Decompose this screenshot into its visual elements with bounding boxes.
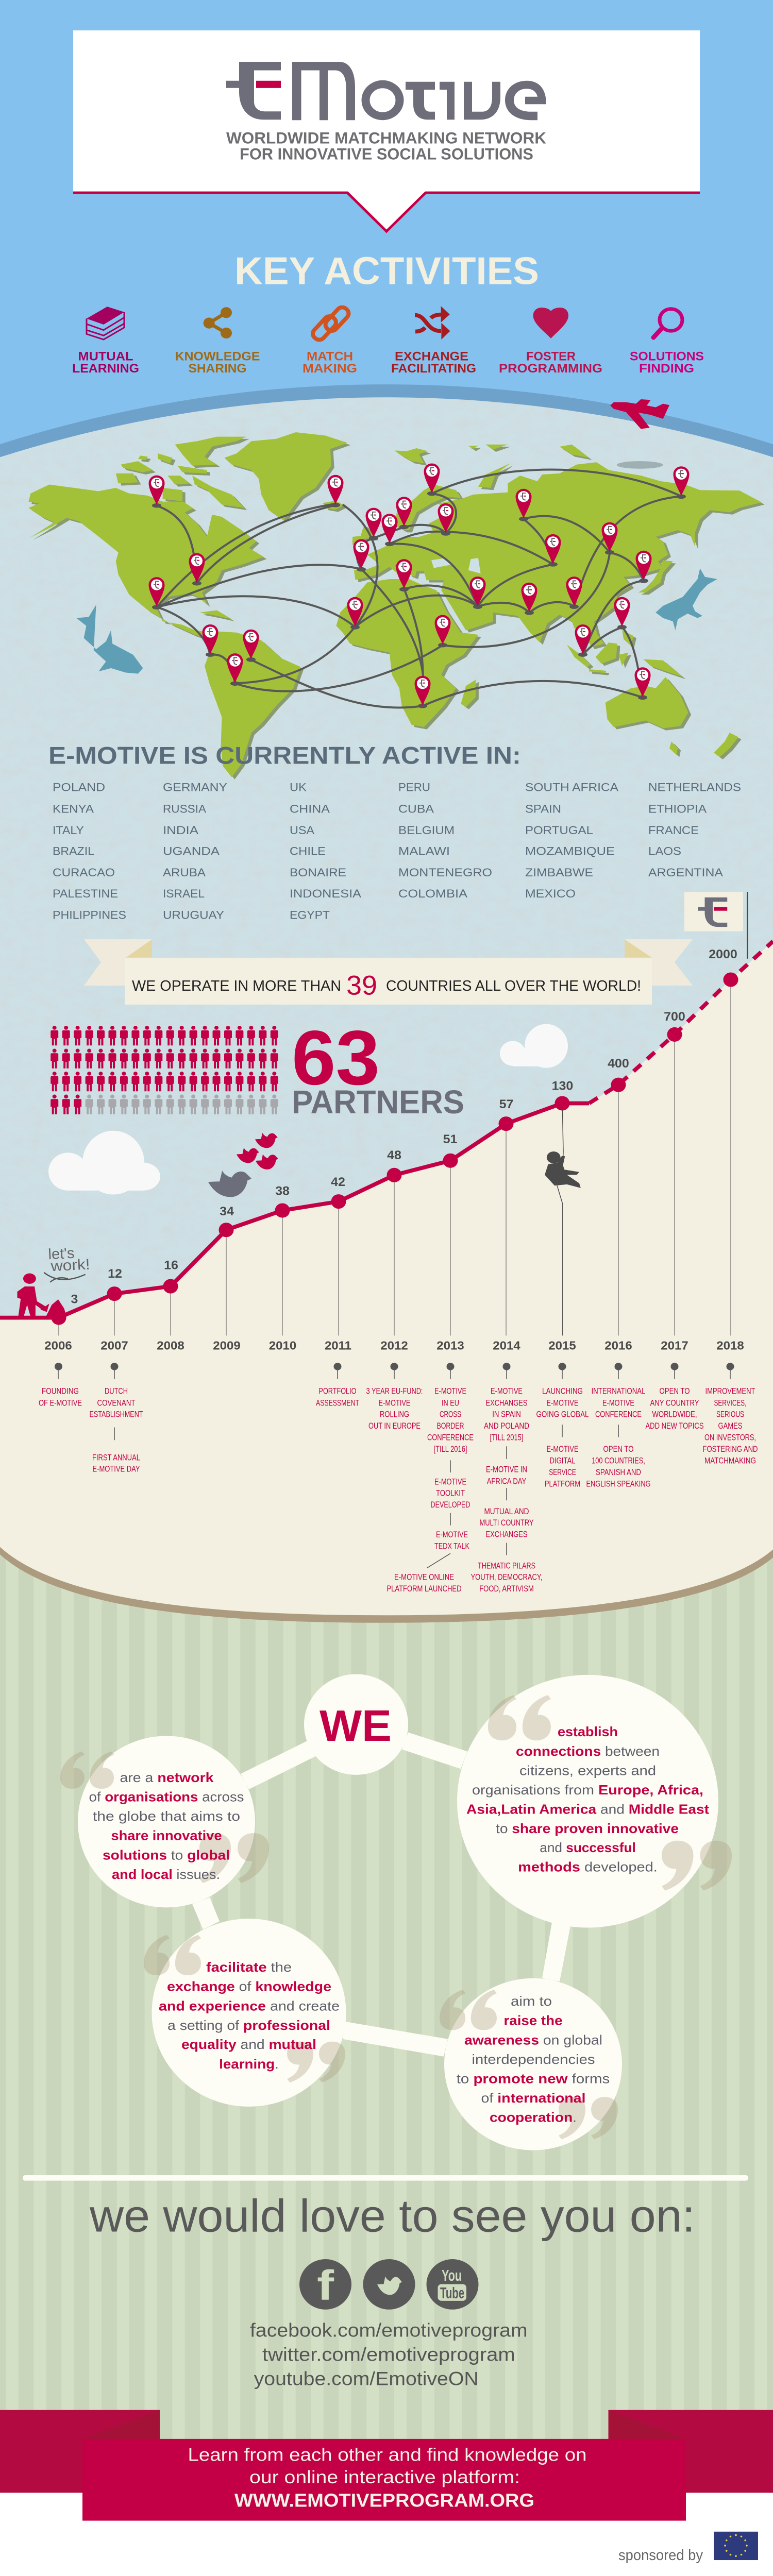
land masses [28, 432, 765, 779]
milestones 2016: CONFERENCE [595, 1409, 642, 1419]
milestones 2016: 100 COUNTRIES, [592, 1455, 645, 1466]
country list: CHINA [290, 803, 330, 815]
year labels: 2012 [380, 1340, 408, 1352]
milestones 2018: GAMES [718, 1420, 742, 1431]
whale [656, 568, 717, 630]
activity: solutions finding: SOLUTIONS [630, 350, 704, 364]
milestones 2014: EXCHANGES [485, 1398, 527, 1408]
milestones 2011: ASSESSMENT [316, 1398, 359, 1408]
heading: currently active in: E-MOTIVE IS CURRENTLY ACTIVE IN: [48, 742, 521, 769]
milestones 2006: FOUNDING [42, 1386, 79, 1396]
sky background [0, 0, 773, 499]
social links: twitter.com/emotiveprogram [262, 2344, 515, 2365]
quotation marks [60, 1695, 732, 2139]
milestones 2013: E-MOTIVE [436, 1529, 468, 1539]
year labels: 2016 [604, 1340, 632, 1352]
country list: INDIA [163, 824, 198, 837]
country list: CHILE [290, 845, 326, 857]
icon: youtube: Tube [440, 2284, 464, 2302]
icon: youtube [427, 2259, 478, 2310]
milestones 2016: ENGLISH SPEAKING [586, 1479, 650, 1489]
statement: awareness: cooperation . [490, 2110, 577, 2125]
activity: solutions finding [630, 309, 704, 376]
icon: twitter [363, 2259, 415, 2310]
heading: see you on: we would love to see you on: [89, 2191, 695, 2242]
speech: let's work: work! [50, 1256, 91, 1275]
chart values: 12 [108, 1267, 122, 1281]
country list: BELGIUM [398, 824, 455, 837]
statement: awareness: of international [481, 2090, 585, 2106]
activity: match making: MAKING [303, 362, 357, 376]
icon: shuffle arrows [415, 306, 450, 340]
country list: FRANCE [648, 824, 699, 837]
activity: mutual learning: MUTUAL [78, 350, 133, 364]
milestones 2006 [39, 1386, 82, 1408]
milestones 2018: MATCHMAKING [704, 1455, 756, 1466]
country list: BONAIRE [290, 867, 346, 879]
milestones 2014: E-MOTIVE [491, 1386, 523, 1396]
milestones 2013: [TILL 2016] [433, 1444, 467, 1454]
country list: PORTUGAL [525, 824, 593, 837]
statement: network: solutions to global [103, 1848, 230, 1862]
milestones 2007 [90, 1386, 143, 1473]
activity: knowledge sharing [175, 307, 260, 376]
statement: facilitate: a setting of professional [167, 2018, 330, 2033]
country list: CUBA [398, 803, 434, 815]
statement: connections: and successful [540, 1840, 636, 1855]
ribbon banner: COUNTRIES ALL OVER THE WORLD! [386, 977, 641, 994]
milestones 2014: MULTI COUNTRY [479, 1517, 534, 1528]
milestones 2012 [366, 1386, 423, 1431]
milestones 2014: AFRICA DAY [487, 1476, 527, 1486]
milestones 2012: OUT IN EUROPE [368, 1420, 421, 1431]
milestones 2016: INTERNATIONAL [591, 1386, 645, 1396]
sponsor text: sponsored by [618, 2547, 703, 2564]
activity: foster programming: FOSTER [526, 350, 576, 364]
statement: network [89, 1770, 244, 1882]
globe horizon arc [0, 384, 773, 499]
statement: connections: Asia,Latin America and Middle East [466, 1802, 709, 1817]
cloud left [48, 1131, 160, 1195]
chart values [71, 947, 737, 1306]
icon: EU flag [714, 2532, 758, 2560]
statement: facilitate: exchange of knowledge [167, 1979, 331, 1994]
activity: exchange facilitating: FACILITATING [391, 362, 476, 376]
milestones 2015: SERVICE [549, 1467, 576, 1477]
statement: network: share innovative [111, 1828, 222, 1843]
statement: facilitate: learning. [219, 2056, 279, 2072]
chart values: 16 [164, 1259, 178, 1273]
country list: USA [290, 824, 314, 837]
milestones 2013: CONFERENCE [427, 1432, 474, 1443]
footer ribbon: WWW.EMOTIVEPROGRAM.ORG [234, 2490, 534, 2511]
footer ribbon: our online interactive platform: [249, 2467, 520, 2487]
country list: ETHIOPIA [648, 803, 707, 815]
icon: facebook: f [317, 2262, 334, 2309]
statement: facilitate [159, 1960, 340, 2072]
statement: connections: connections between [516, 1743, 660, 1759]
year labels: 2010 [269, 1340, 296, 1352]
milestones 2006: OF E-MOTIVE [39, 1398, 82, 1408]
milestones 2014: MUTUAL AND [484, 1506, 529, 1516]
year labels: 2006 [44, 1340, 72, 1352]
ribbon banner: 39 [346, 970, 377, 1001]
flag with logo mark [684, 892, 748, 959]
milestones 2014: FOOD, ARTIVISM [479, 1583, 534, 1594]
map pins [148, 463, 690, 708]
icon: share [204, 307, 232, 338]
activity: solutions finding: FINDING [639, 362, 694, 376]
stripes background [0, 1540, 773, 2493]
country list: URUGUAY [163, 909, 224, 921]
shark [76, 605, 143, 674]
divider bar [23, 2175, 748, 2181]
footer ribbon [0, 2410, 773, 2521]
milestones 2013: IN EU [442, 1398, 459, 1408]
country list: SPAIN [525, 803, 561, 815]
chart values: 57 [499, 1097, 513, 1111]
chart values: 3 [71, 1293, 78, 1306]
country list: GERMANY [163, 781, 227, 794]
we network circles [78, 1674, 718, 2150]
milestones 2013 [386, 1386, 474, 1594]
milestones 2013: TOOLKIT [436, 1488, 465, 1498]
country list: BRAZIL [53, 845, 94, 857]
milestones 2015: E-MOTIVE [546, 1398, 578, 1408]
milestones 2014: EXCHANGES [485, 1529, 527, 1539]
country list: MOZAMBIQUE [525, 845, 615, 857]
country list: MEXICO [525, 887, 576, 900]
paper textured background [0, 397, 773, 1620]
activity: mutual learning [72, 307, 139, 376]
milestones 2018: ON INVESTORS, [704, 1432, 756, 1443]
statement: connections: organisations from Europe, Africa, [472, 1782, 703, 1798]
timeline connector ticks [114, 1425, 618, 1568]
activity: mutual learning: LEARNING [72, 362, 139, 376]
milestones 2017: WORLDWIDE, [652, 1409, 697, 1419]
milestones 2011: PORTFOLIO [318, 1386, 356, 1396]
statement: connections [466, 1724, 709, 1875]
country list: UGANDA [163, 845, 220, 857]
milestones 2013: TEDX TALK [434, 1541, 469, 1551]
grey cloud shadow [617, 461, 663, 469]
activity: knowledge sharing: SHARING [188, 362, 246, 376]
milestones 2015: DIGITAL [549, 1455, 575, 1466]
milestones 2007: FIRST ANNUAL [92, 1452, 140, 1462]
statement: connections: establish [558, 1724, 618, 1739]
statement: connections: to share proven innovative [496, 1821, 679, 1836]
climber on rope [545, 1110, 581, 1204]
partners count: 63 [292, 1015, 380, 1101]
cream hill [0, 941, 773, 1615]
partners count: PARTNERS [292, 1083, 464, 1121]
milestones 2007: COVENANT [97, 1398, 136, 1408]
network routes [157, 470, 681, 707]
plane [610, 399, 669, 429]
statement: awareness: awareness on global [464, 2032, 602, 2047]
milestones 2013: CROSS [440, 1409, 461, 1419]
heading: key activities: KEY ACTIVITIES [234, 250, 539, 293]
milestones 2013: DEVELOPED [430, 1499, 470, 1510]
year labels: 2014 [493, 1340, 520, 1352]
country list: PALESTINE [53, 887, 118, 900]
country list: ISRAEL [163, 887, 205, 900]
statement: connections: citizens, experts and [519, 1763, 656, 1778]
milestones 2012: 3 YEAR EU-FUND: [366, 1386, 423, 1396]
chart values: 34 [220, 1205, 234, 1218]
footer white [0, 2493, 773, 2576]
social links [250, 2319, 528, 2389]
country list: LAOS [648, 845, 681, 857]
country list: ARUBA [163, 867, 206, 879]
milestones 2016 [586, 1386, 650, 1489]
milestones 2017 [645, 1386, 703, 1431]
country list: ARGENTINA [648, 867, 723, 879]
activity: match making [303, 305, 357, 376]
footer ribbon: Learn from each other and find knowledge on [188, 2445, 586, 2465]
statement: facilitate: facilitate the [206, 1960, 292, 1975]
tagline [226, 129, 547, 163]
chart values: 48 [387, 1148, 401, 1162]
social links: facebook.com/emotiveprogram [250, 2319, 528, 2341]
icon: youtube: You [442, 2267, 462, 2284]
milestones 2014: E-MOTIVE IN [486, 1464, 527, 1474]
cloud right [500, 1024, 568, 1068]
milestones 2014: THEMATIC PILARS [478, 1561, 535, 1570]
statement: facilitate: and experience and create [159, 1998, 340, 2013]
chart values: 51 [443, 1132, 457, 1146]
header card with logo [73, 30, 700, 231]
icon: facebook [299, 2259, 351, 2310]
milestones 2014: YOUTH, DEMOCRACY, [470, 1572, 542, 1582]
we network connectors [192, 1733, 570, 2057]
activity: foster programming: PROGRAMMING [499, 362, 602, 376]
milestones 2013: E-MOTIVE [434, 1477, 466, 1486]
country list: RUSSIA [163, 803, 206, 815]
milestones 2013: E-MOTIVE [434, 1386, 466, 1396]
we heading: WE [320, 1702, 392, 1751]
milestones 2015: LAUNCHING [542, 1386, 583, 1396]
timeline pins [55, 1363, 734, 1379]
milestones 2017: OPEN TO [660, 1386, 690, 1396]
logo: E-Motive [226, 62, 546, 120]
milestones 2017: ANY COUNTRY [650, 1398, 699, 1408]
milestones 2015: GOING GLOBAL [536, 1409, 589, 1419]
milestones 2014: AND POLAND [484, 1420, 529, 1431]
timeline vertical lines [59, 979, 731, 1335]
milestones 2018 [702, 1386, 758, 1466]
country list: PHILIPPINES [53, 909, 126, 921]
milestones 2011 [316, 1386, 359, 1408]
worker with shovel [17, 1274, 66, 1317]
country list: MALAWI [398, 845, 450, 857]
country list [53, 781, 741, 921]
statement: facilitate: equality and mutual [181, 2037, 316, 2052]
milestones 2016: SPANISH AND [596, 1467, 641, 1477]
milestones 2018: SERIOUS [716, 1409, 744, 1419]
country list: NETHERLANDS [648, 781, 741, 794]
milestones 2015 [536, 1386, 589, 1489]
year labels: 2008 [157, 1340, 184, 1352]
ribbon banner: WE OPERATE IN MORE THAN [132, 977, 341, 994]
activity: exchange facilitating: EXCHANGE [395, 350, 468, 364]
milestones 2013: BORDER [436, 1420, 464, 1431]
country list: INDONESIA [290, 887, 361, 900]
statement: connections: methods developed. [518, 1859, 658, 1875]
milestones 2012: ROLLING [380, 1409, 409, 1419]
country list: SOUTH AFRICA [525, 781, 618, 794]
activity: knowledge sharing: KNOWLEDGE [175, 350, 260, 364]
milestones 2007: DUTCH [105, 1386, 128, 1396]
statement: awareness: aim to [511, 1993, 552, 2009]
milestones 2014: [TILL 2015] [490, 1432, 523, 1443]
milestones 2018: IMPROVEMENT [705, 1386, 755, 1396]
year labels: 2018 [716, 1340, 744, 1352]
icon: magnifier [653, 309, 682, 337]
milestones 2012: E-MOTIVE [378, 1398, 410, 1408]
milestones 2015: PLATFORM [545, 1479, 580, 1489]
activity: exchange facilitating [391, 306, 476, 376]
milestones 2013: PLATFORM LAUNCHED [386, 1583, 462, 1594]
country list: COLOMBIA [398, 887, 467, 900]
milestones 2016: OPEN TO [603, 1444, 633, 1454]
statement: network: and local issues. [112, 1867, 220, 1882]
country list: ZIMBABWE [525, 867, 593, 879]
world map with network [28, 399, 765, 779]
country list: MONTENEGRO [398, 867, 492, 879]
statement: network: are a network [120, 1770, 214, 1785]
statement: network: of organisations across [89, 1789, 244, 1805]
statement: awareness [457, 1993, 610, 2125]
milestones 2016: E-MOTIVE [602, 1398, 634, 1408]
social links: youtube.com/EmotiveON [254, 2368, 479, 2389]
growth line chart [0, 941, 773, 1325]
icon: heart [533, 308, 568, 338]
activity: match making: MATCH [307, 350, 353, 364]
chart values: 42 [331, 1175, 345, 1189]
milestones 2007: ESTABLISHMENT [90, 1409, 143, 1419]
statement: awareness: interdependencies [472, 2052, 595, 2067]
statement: awareness: to promote new forms [457, 2071, 610, 2086]
birds [208, 1133, 278, 1197]
year labels: 2011 [325, 1340, 351, 1352]
milestones 2018: SERVICES, [714, 1398, 746, 1408]
statement: awareness: raise the [503, 2013, 562, 2028]
chart values: 700 [664, 1010, 685, 1024]
tagline: FOR INNOVATIVE SOCIAL SOLUTIONS [240, 145, 533, 163]
ribbon banner [84, 939, 693, 1005]
speech: let's work: let's [48, 1245, 75, 1263]
country list: KENYA [53, 803, 94, 815]
country list: CURACAO [53, 867, 115, 879]
partners count [292, 1015, 464, 1121]
tagline: WORLDWIDE MATCHMAKING NETWORK [226, 129, 547, 147]
chart values: 400 [608, 1057, 629, 1071]
icon: books [87, 307, 124, 340]
milestones 2015: E-MOTIVE [546, 1444, 578, 1454]
year labels: 2017 [661, 1340, 688, 1352]
statement: network: the globe that aims to [93, 1809, 240, 1824]
country list: PERU [398, 781, 430, 794]
year labels: 2007 [100, 1340, 128, 1352]
milestones 2017: ADD NEW TOPICS [645, 1420, 703, 1431]
country list: UK [290, 781, 307, 794]
country list: EGYPT [290, 909, 330, 921]
milestones 2014: IN SPAIN [492, 1409, 521, 1419]
tan band under hill [0, 1546, 773, 1623]
year labels: 2015 [548, 1340, 576, 1352]
year labels [44, 1340, 744, 1352]
milestones 2007: E-MOTIVE DAY [93, 1464, 140, 1473]
partners: people pictogram [51, 1026, 278, 1114]
chart values: 130 [552, 1079, 573, 1093]
country list: POLAND [53, 781, 105, 794]
milestones 2013: E-MOTIVE ONLINE [394, 1572, 454, 1582]
speech: let's work [43, 1244, 91, 1282]
year labels: 2009 [213, 1340, 241, 1352]
chart values: 2000 [709, 947, 737, 961]
year labels: 2013 [436, 1340, 464, 1352]
activity: foster programming [499, 308, 602, 376]
country list: ITALY [53, 824, 84, 837]
milestones 2014 [470, 1386, 542, 1594]
chart values: 38 [275, 1184, 290, 1198]
icon: chain link [311, 305, 351, 342]
